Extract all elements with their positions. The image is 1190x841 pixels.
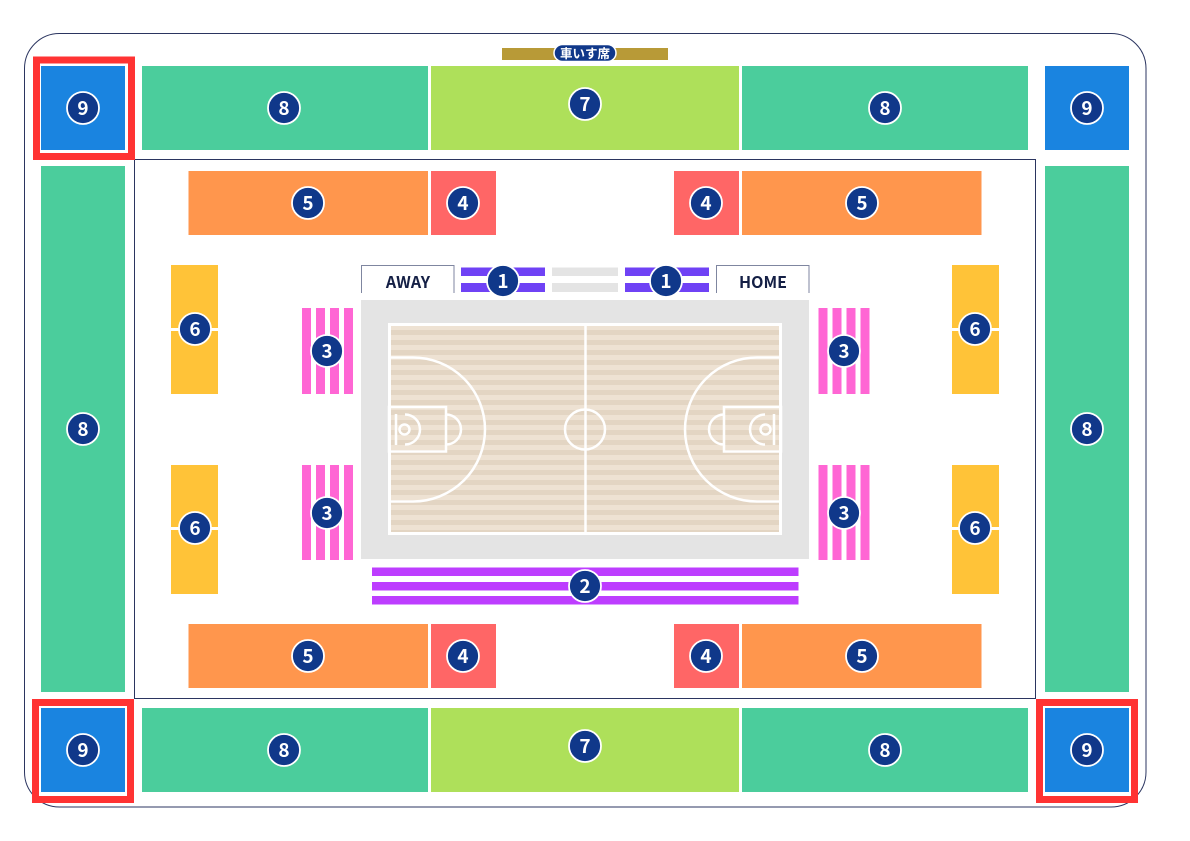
- block 8 bottom-right: 8: [879, 736, 891, 763]
- block 8 right side: [1045, 166, 1129, 692]
- block 1 left: [461, 265, 545, 297]
- block 5 lower-right: [742, 624, 982, 688]
- block 3 lower-left: [302, 465, 353, 560]
- block 4 lower-right: 4: [700, 642, 712, 669]
- block 4 lower-right: [674, 624, 739, 688]
- block 1 right: [625, 265, 709, 297]
- block 1 right: 1: [660, 267, 672, 294]
- HOME bench label: HOME: [739, 269, 787, 293]
- block 9 top-right: [1045, 66, 1129, 150]
- block 8 top-left: [142, 66, 428, 150]
- reserved bench bars: [552, 268, 618, 292]
- block 5 lower-left: 5: [302, 642, 314, 669]
- block 6 upper-left: [171, 265, 218, 394]
- block 3 upper-left: 3: [321, 337, 333, 364]
- block 4 lower-left: 4: [457, 642, 469, 669]
- block 8 right side: 8: [1081, 415, 1093, 442]
- block 4 upper-left: [431, 171, 496, 235]
- block 5 lower-left: [188, 624, 428, 688]
- block 3 lower-right: [818, 465, 870, 560]
- AWAY bench label: [362, 266, 454, 293]
- block 3 lower-left: 3: [321, 499, 333, 526]
- block 4 lower-left: [431, 624, 496, 688]
- arena floor outline: [134, 160, 1036, 698]
- block 6 lower-right: 6: [969, 514, 981, 541]
- block 6 lower-right: [952, 465, 999, 594]
- block 6 lower-left: [171, 465, 218, 594]
- block 7 bottom: [431, 708, 739, 792]
- block 8 top-right: [742, 66, 1028, 150]
- block 4 upper-right: [674, 171, 739, 235]
- block 6 upper-right: [952, 265, 999, 394]
- block 3 lower-right: 3: [838, 499, 850, 526]
- block 7 top: 7: [579, 90, 591, 117]
- HOME bench label: [716, 266, 809, 293]
- wheelchair seating: 車いす席: [560, 46, 610, 61]
- block 5 upper-right: [742, 171, 982, 235]
- block 8 bottom-right: [742, 708, 1028, 792]
- block 5 upper-left: 5: [302, 189, 314, 216]
- block 3 upper-right: [818, 308, 870, 394]
- block 9 top-left: [41, 66, 125, 150]
- block 5 lower-right: 5: [856, 642, 868, 669]
- block 7 top: [431, 66, 739, 150]
- block 9 top-left: 9: [77, 94, 89, 121]
- highlight frame: bottom-right 9: [1040, 702, 1134, 800]
- block 3 upper-right: 3: [838, 337, 850, 364]
- block 4 upper-right: 4: [700, 189, 712, 216]
- block 8 left side: 8: [77, 415, 89, 442]
- wheelchair seating: [502, 44, 668, 62]
- block 6 upper-right: 6: [969, 315, 981, 342]
- block 9 bottom-right: 9: [1081, 736, 1093, 763]
- block 9 top-right: 9: [1081, 94, 1093, 121]
- block 8 left side: [41, 166, 125, 692]
- block 5 upper-left: [188, 171, 428, 235]
- block 1 left: 1: [497, 267, 509, 294]
- AWAY bench label: AWAY: [385, 269, 431, 293]
- block 6 lower-left: 6: [189, 514, 201, 541]
- block 9 bottom-left: [41, 708, 125, 792]
- block 6 upper-left: 6: [189, 315, 201, 342]
- block 5 upper-right: 5: [856, 189, 868, 216]
- block 8 top-left: 8: [278, 94, 290, 121]
- block 8 bottom-left: 8: [278, 736, 290, 763]
- basketball court: [389, 324, 781, 534]
- block 2: [372, 568, 798, 604]
- block 9 bottom-left: 9: [77, 736, 89, 763]
- block 2: 2: [579, 572, 591, 599]
- block 7 bottom: 7: [579, 732, 591, 759]
- court surround: [361, 300, 809, 559]
- highlight frame: bottom-left 9: [36, 702, 130, 800]
- block 3 upper-left: [302, 308, 353, 394]
- block 4 upper-left: 4: [457, 189, 469, 216]
- block 8 top-right: 8: [879, 94, 891, 121]
- block 8 bottom-left: [142, 708, 428, 792]
- highlight frame: top-left 9: [36, 60, 132, 156]
- block 9 bottom-right: [1045, 708, 1129, 792]
